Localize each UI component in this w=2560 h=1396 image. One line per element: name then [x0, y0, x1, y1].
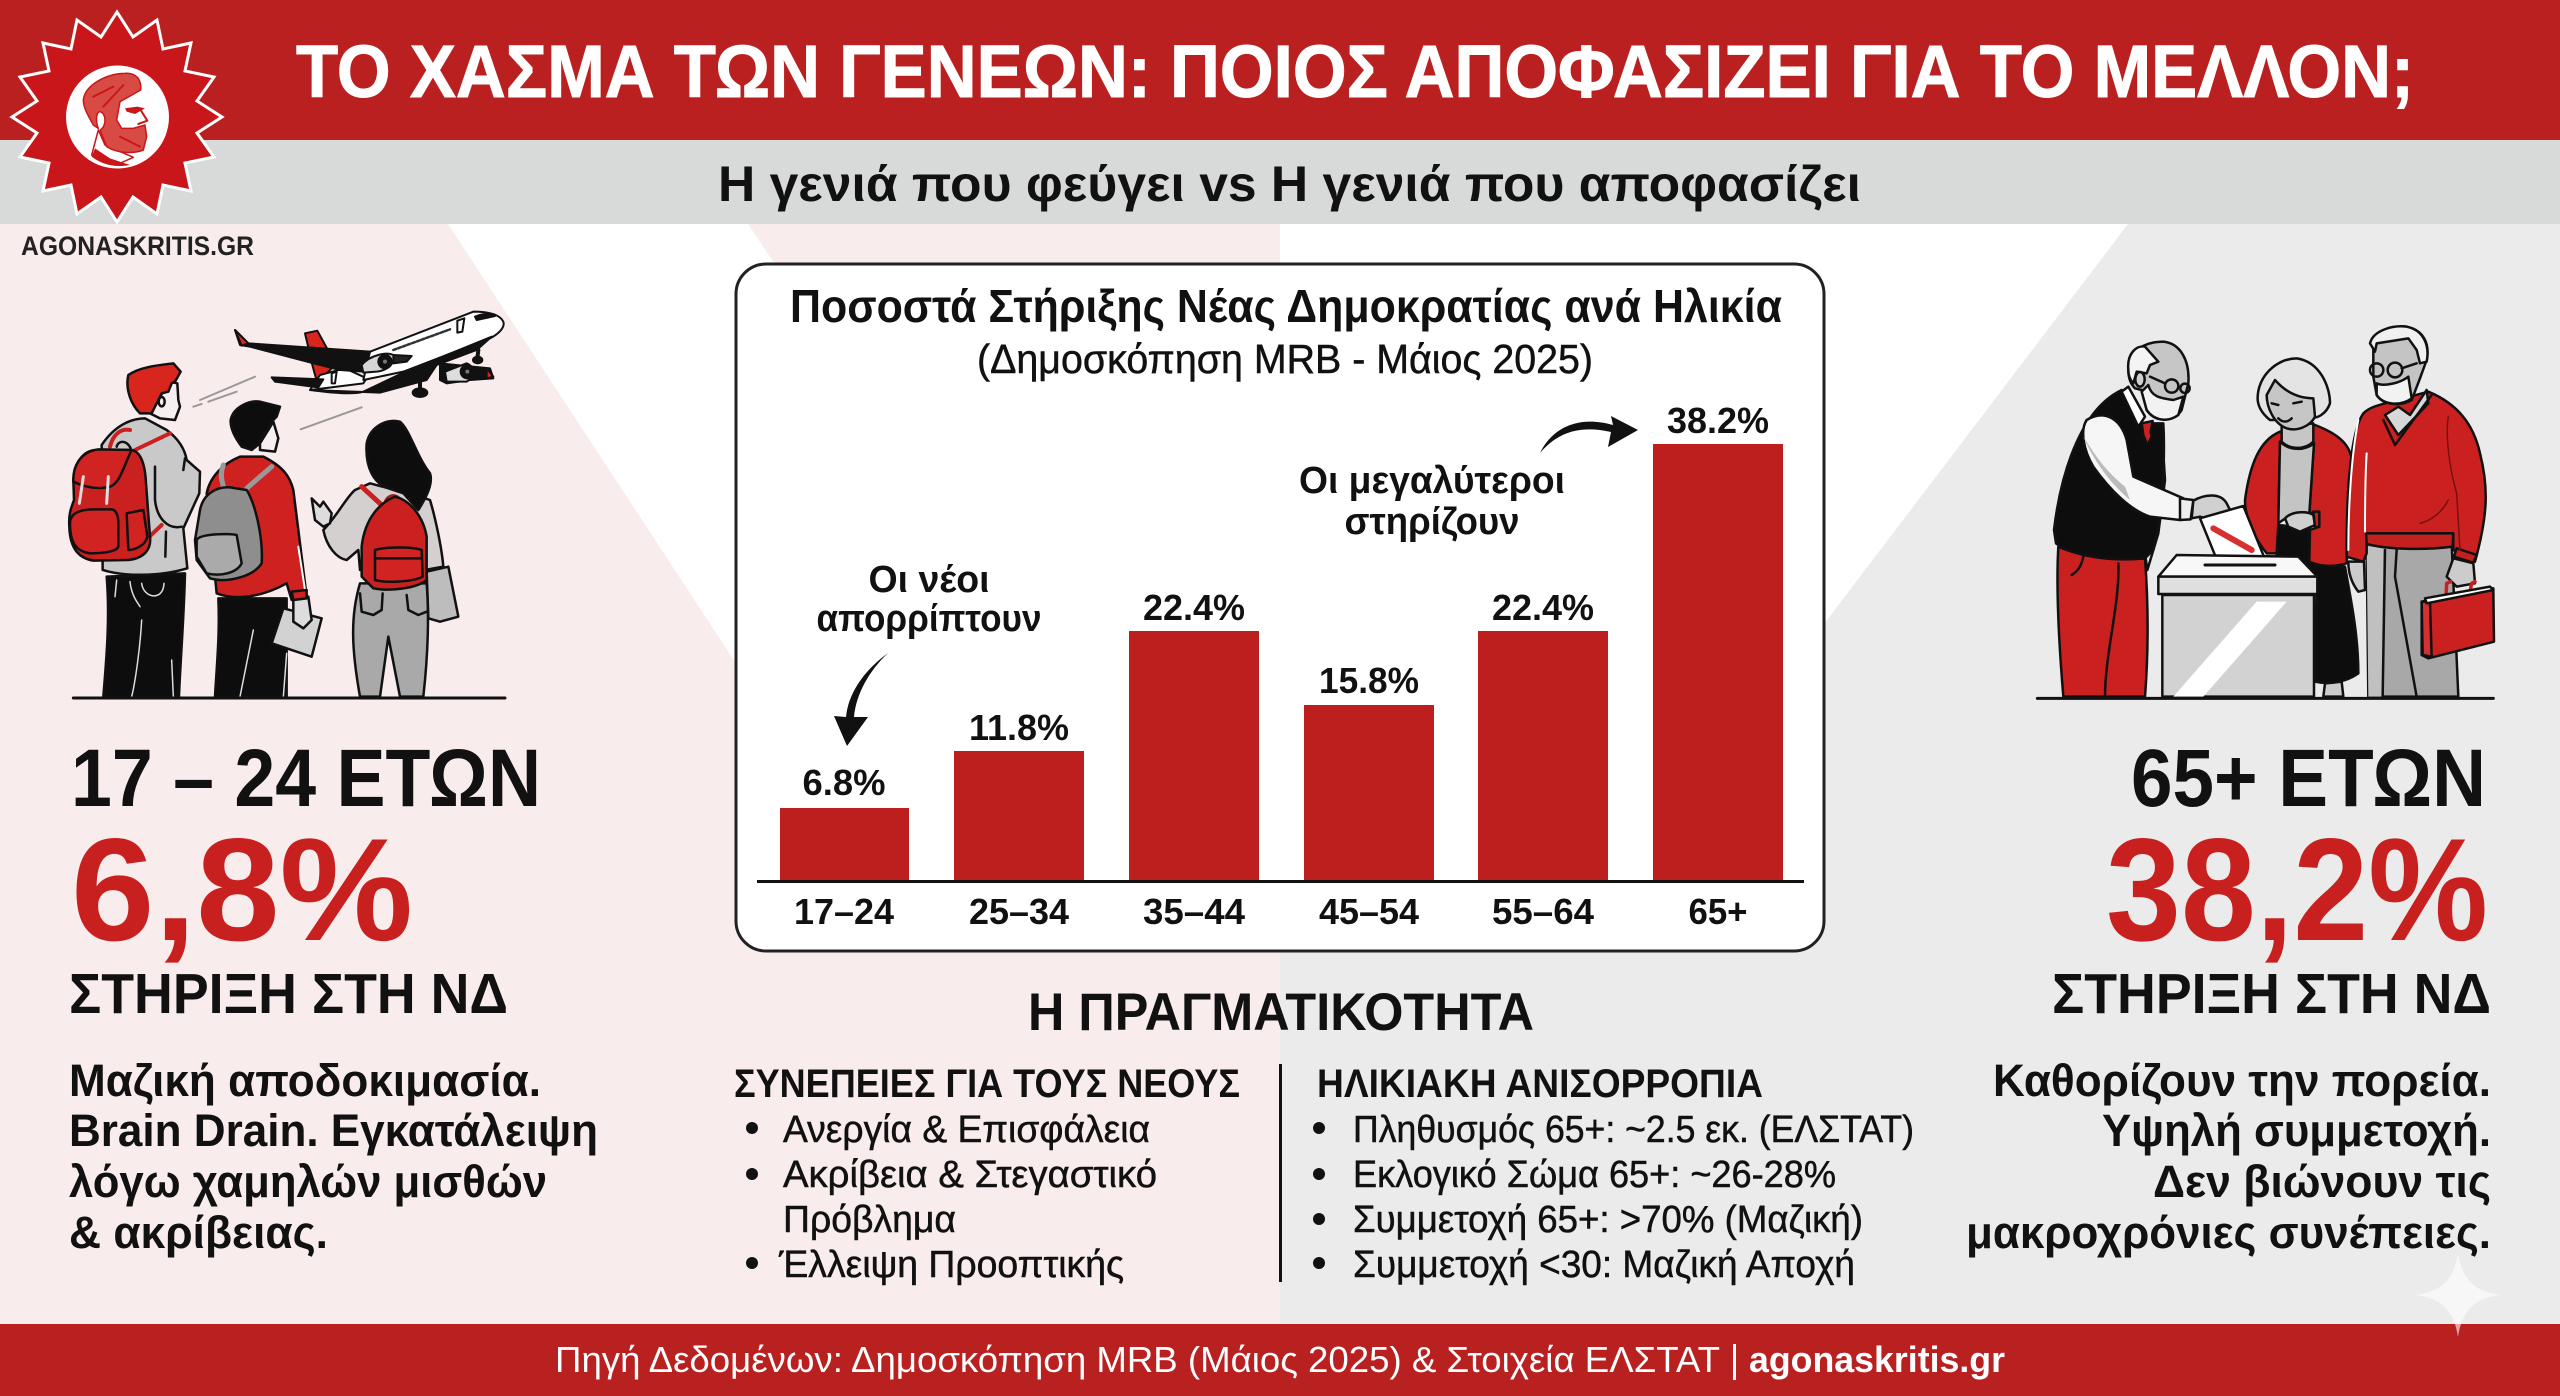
- callout: young reject: απορρίπτουν: [816, 598, 1042, 640]
- bars: [780, 444, 1783, 881]
- person: young man with grey backpack: [195, 401, 322, 697]
- description text: Καθορίζουν την πορεία.: [1993, 1055, 2491, 1106]
- person: young man with red backpack: [69, 363, 200, 697]
- text block: consequences for the young: Ανεργία & Επισφάλεια: [783, 1109, 1150, 1151]
- callout: older support: Οι μεγαλύτεροι: [1299, 460, 1565, 502]
- speed lines: [193, 377, 362, 429]
- icon: sparkle watermark: [2415, 1253, 2501, 1337]
- callout: young reject: Οι νέοι: [868, 559, 990, 601]
- value labels: 15.8%: [1319, 660, 1419, 701]
- axis labels: 65+: [1688, 891, 1748, 932]
- value labels: 6.8%: [802, 762, 886, 803]
- support label: ΣΤΗΡΙΞΗ ΣΤΗ ΝΔ: [69, 962, 508, 1026]
- support label: ΣΤΗΡΙΞΗ ΣΤΗ ΝΔ: [2052, 962, 2491, 1026]
- footer: Πηγή Δεδομένων: Δημοσκόπηση MRB (Μάιος 2025) & Στοιχεία ΕΛΣΤΑΤ: [555, 1339, 1720, 1380]
- description text: Brain Drain. Εγκατάλειψη: [69, 1105, 598, 1156]
- callout: older support: στηρίζουν: [1344, 501, 1520, 543]
- description text: & ακρίβειας.: [69, 1207, 328, 1258]
- title: ΤΟ ΧΑΣΜΑ ΤΩΝ ΓΕΝΕΩΝ: ΠΟΙΟΣ ΑΠΟΦΑΣΙΖΕΙ ΓΙΑ ΤΟ ΜΕΛΛΟΝ;: [296, 30, 2414, 113]
- chart title: Ποσοστά Στήριξης Νέας Δημοκρατίας ανά Ηλικία: [790, 280, 1782, 332]
- text block: age imbalance: [1313, 1062, 1914, 1286]
- ground line: [2037, 697, 2493, 700]
- panel: bar chart card: [736, 264, 1824, 951]
- value labels: 22.4%: [1492, 587, 1594, 628]
- description text: λόγω χαμηλών μισθών: [69, 1156, 547, 1207]
- text block: age imbalance: Συμμετοχή <30: Μαζική Αποχή: [1353, 1244, 1855, 1286]
- big percentage: 38,2%: [2106, 808, 2488, 971]
- footer: [0, 1324, 2560, 1396]
- divider: [1279, 1064, 1282, 1282]
- text block: age imbalance: Πληθυσμός 65+: ~2.5 εκ. (ΕΛΣΤΑΤ): [1353, 1109, 1914, 1151]
- description text: μακροχρόνιες συνέπειες.: [1966, 1207, 2491, 1258]
- value labels: 38.2%: [1667, 400, 1769, 441]
- text block: consequences for the young: [734, 1062, 1240, 1286]
- text block: consequences for the young: Έλλειψη Προοπτικής: [778, 1244, 1124, 1286]
- text block: age imbalance: Εκλογικό Σώμα 65+: ~26-28%: [1353, 1154, 1836, 1196]
- ground line: [73, 696, 505, 699]
- chart subtitle: (Δημοσκόπηση MRB - Μάιος 2025): [977, 336, 1593, 382]
- description text: Υψηλή συμμετοχή.: [2102, 1105, 2491, 1156]
- axis labels: 35–44: [1143, 891, 1245, 932]
- text block: consequences for the young: Ακρίβεια & Στεγαστικό: [783, 1154, 1157, 1196]
- person: man with briefcase: [2347, 326, 2494, 697]
- arrow: down to 17-24 bar: [834, 653, 888, 746]
- value labels: 11.8%: [969, 707, 1069, 748]
- axis labels: 55–64: [1492, 891, 1594, 932]
- footer: agonaskritis.gr: [1749, 1339, 2005, 1380]
- person: young woman: [312, 421, 458, 697]
- callout: older support: [1299, 460, 1565, 543]
- reality section heading: Η ΠΡΑΓΜΑΤΙΚΟΤΗΤΑ: [1028, 983, 1534, 1042]
- header band: [0, 0, 2560, 224]
- big percentage: 6,8%: [71, 808, 413, 971]
- subtitle: Η γενιά που φεύγει vs Η γενιά που αποφασίζει: [718, 156, 1861, 212]
- panel: right generation: [1966, 326, 2494, 1258]
- arrow: to 65+ bar: [1540, 416, 1638, 453]
- person: woman: [2245, 358, 2358, 697]
- person: voter: [2054, 342, 2233, 697]
- description text: [1966, 1055, 2491, 1258]
- icon: ballot box: [2158, 506, 2317, 697]
- axis labels: [794, 891, 1748, 932]
- age heading: 65+ ΕΤΩΝ: [2131, 733, 2486, 824]
- axis line: [757, 880, 1804, 883]
- illustration: young people watching a plane: [69, 312, 505, 698]
- age heading: 17 – 24 ΕΤΩΝ: [71, 733, 541, 824]
- illustration: older people voting: [2037, 326, 2494, 698]
- description text: Δεν βιώνουν τις: [2153, 1156, 2491, 1207]
- text block: age imbalance: ΗΛΙΚΙΑΚΗ ΑΝΙΣΟΡΡΟΠΙΑ: [1317, 1062, 1763, 1106]
- axis labels: 17–24: [794, 891, 894, 932]
- description text: Μαζική αποδοκιμασία.: [69, 1055, 541, 1106]
- text block: consequences for the young: ΣΥΝΕΠΕΙΕΣ ΓΙΑ ΤΟΥΣ ΝΕΟΥΣ: [734, 1062, 1240, 1106]
- axis labels: 45–54: [1319, 891, 1419, 932]
- logo: [12, 12, 222, 222]
- text block: consequences for the young: Πρόβλημα: [783, 1199, 956, 1241]
- text block: age imbalance: Συμμετοχή 65+: >70% (Μαζική): [1353, 1199, 1863, 1241]
- value labels: [802, 400, 1769, 803]
- logo caption: AGONASKRITIS.GR: [21, 231, 254, 261]
- icon: plane: [235, 312, 504, 397]
- panel: left generation: [69, 312, 598, 1258]
- description text: [69, 1055, 598, 1258]
- axis labels: 25–34: [969, 891, 1069, 932]
- value labels: 22.4%: [1143, 587, 1245, 628]
- callout: young reject: [816, 559, 1042, 640]
